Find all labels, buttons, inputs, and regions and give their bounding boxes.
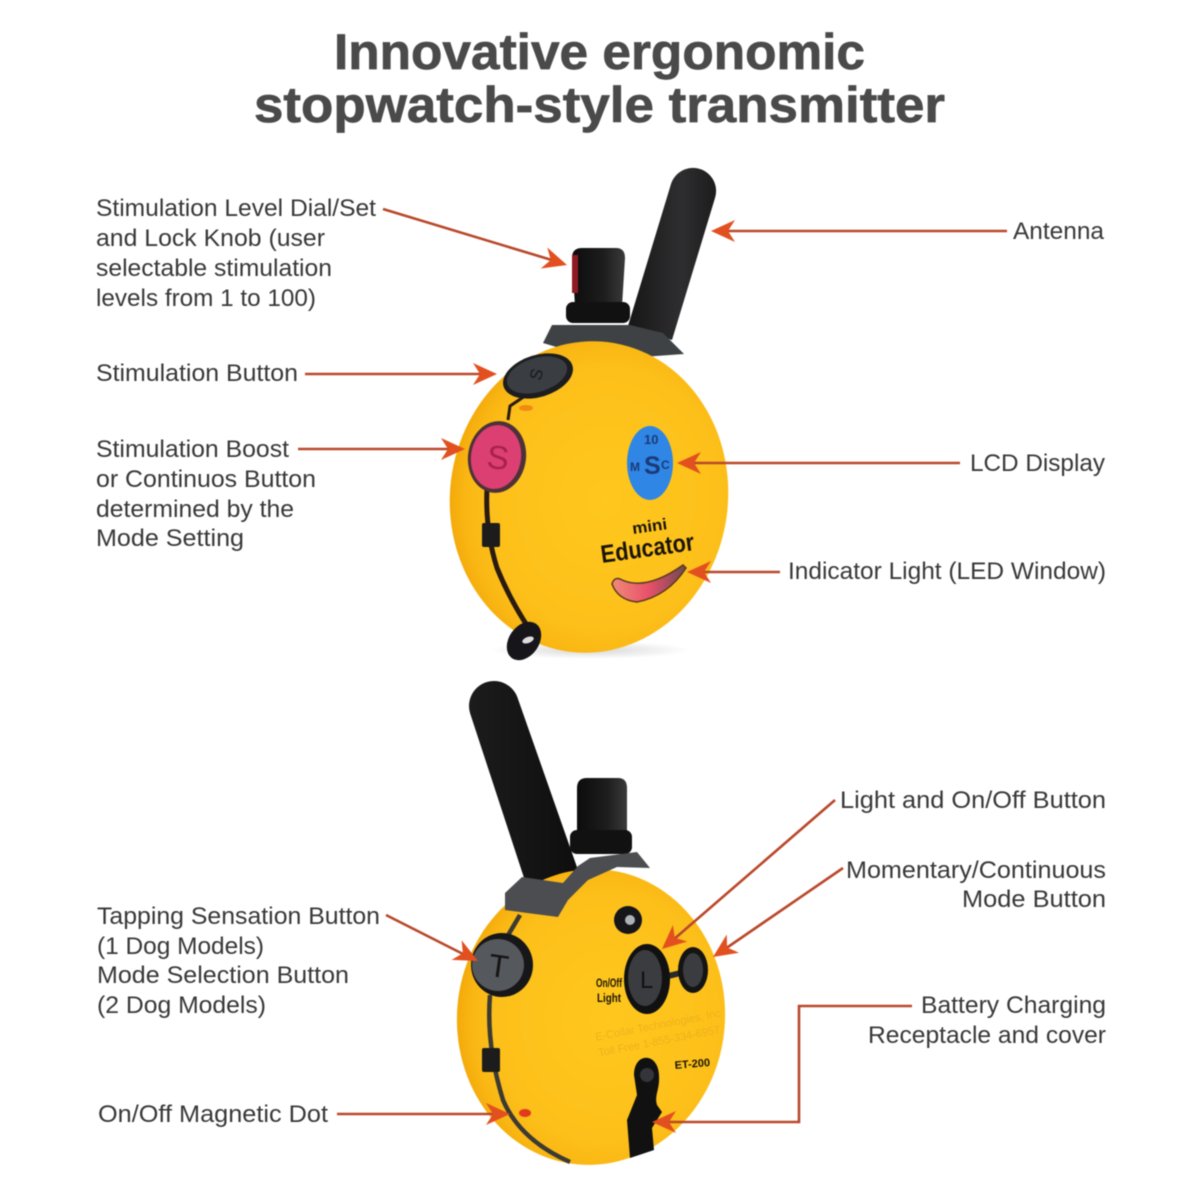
LCD display: M bbox=[630, 460, 640, 474]
yellow body bbox=[445, 858, 737, 1176]
on/off light label: Light bbox=[597, 991, 621, 1005]
arrow: indicator light bbox=[687, 561, 780, 583]
label: stimulation boost: Mode Setting bbox=[96, 525, 244, 552]
yellow body bbox=[432, 325, 746, 669]
LCD display bbox=[627, 426, 673, 500]
light button: L bbox=[640, 967, 653, 994]
label: tapping sensation: Mode Selection Button bbox=[97, 962, 349, 989]
arrow: mode button bbox=[707, 868, 843, 966]
label: stimulation boost: determined by the bbox=[96, 496, 294, 523]
charging receptacle and cover bbox=[627, 1058, 662, 1158]
mode button bbox=[678, 947, 708, 993]
on/off light label bbox=[596, 976, 623, 1005]
label: tapping sensation: (1 Dog Models) bbox=[97, 933, 264, 960]
label: stimulation boost: or Continuos Button bbox=[96, 466, 316, 493]
LCD display: C bbox=[661, 458, 670, 472]
tapping button bbox=[471, 933, 533, 997]
LCD display: 10 bbox=[644, 432, 658, 447]
antenna bbox=[469, 681, 578, 890]
dial knob bbox=[566, 248, 630, 323]
arrow: stimulation button bbox=[305, 363, 497, 385]
logo: Educator bbox=[599, 528, 696, 569]
antenna bbox=[628, 168, 716, 340]
label: stimulation level dial: Stimulation Level Dial/Set bbox=[96, 195, 376, 222]
label: stimulation button: Stimulation Button bbox=[96, 360, 298, 387]
label: battery charging bbox=[868, 992, 1106, 1049]
label: stimulation level dial bbox=[96, 195, 376, 312]
magnetic dot bbox=[519, 1109, 531, 1117]
title bbox=[254, 24, 945, 133]
title: Innovative ergonomic bbox=[334, 24, 865, 80]
arrow: LCD display bbox=[677, 452, 960, 474]
model label: ET-200 bbox=[674, 1057, 711, 1072]
label: battery charging: Receptacle and cover bbox=[868, 1022, 1106, 1049]
label: momentary mode bbox=[846, 857, 1106, 913]
cord bbox=[487, 488, 530, 630]
label: tapping sensation bbox=[97, 903, 380, 1019]
label: antenna: Antenna bbox=[1013, 218, 1105, 245]
LED window bbox=[612, 565, 686, 602]
device: front of transmitter bbox=[432, 168, 746, 669]
label: LCD display: LCD Display bbox=[970, 450, 1105, 477]
label: stimulation level dial: and Lock Knob (user bbox=[96, 225, 325, 252]
label: stimulation boost: Stimulation Boost bbox=[96, 436, 289, 463]
screw bbox=[614, 906, 642, 934]
label: battery charging: Battery Charging bbox=[921, 992, 1106, 1019]
light button bbox=[624, 944, 693, 1014]
cord bbox=[489, 915, 570, 1162]
tapping button: T bbox=[486, 947, 511, 985]
boost button bbox=[463, 417, 531, 497]
arrow: antenna bbox=[711, 220, 1007, 242]
arrow: boost button bbox=[298, 438, 465, 460]
label: magnetic dot: On/Off Magnetic Dot bbox=[98, 1101, 328, 1128]
logo: mini bbox=[631, 516, 668, 538]
label: stimulation level dial: levels from 1 to 100) bbox=[96, 285, 316, 312]
LCD display: S bbox=[644, 452, 661, 480]
arrow: magnetic dot bbox=[337, 1103, 510, 1125]
label: stimulation level dial: selectable stimulation bbox=[96, 255, 332, 282]
device: back of transmitter bbox=[445, 681, 737, 1176]
arrow: charging receptacle bbox=[652, 1006, 912, 1133]
mounting bracket bbox=[543, 325, 684, 360]
boost button: S bbox=[485, 438, 511, 477]
label: stimulation boost bbox=[96, 436, 316, 552]
label: tapping sensation: Tapping Sensation Button bbox=[97, 903, 380, 930]
title: stopwatch-style transmitter bbox=[254, 77, 945, 133]
faded company text bbox=[594, 1007, 725, 1059]
arrow: light button bbox=[655, 800, 835, 957]
label: indicator light: Indicator Light (LED Window) bbox=[788, 558, 1106, 585]
faded company text: Toll Free 1-855-334-6957 bbox=[597, 1024, 721, 1059]
arrow: tapping button bbox=[386, 915, 483, 971]
label: momentary mode: Momentary/Continuous bbox=[846, 857, 1106, 884]
cord loop bbox=[500, 615, 548, 667]
stimulation button bbox=[497, 345, 579, 407]
on/off light label: On/Off bbox=[596, 976, 623, 990]
dial knob bbox=[570, 778, 632, 854]
arrow: dial knob bbox=[383, 209, 570, 276]
label: tapping sensation: (2 Dog Models) bbox=[97, 992, 266, 1019]
faded company text: E-Collar Technologies, Inc bbox=[594, 1007, 722, 1044]
mounting bracket bbox=[505, 852, 650, 917]
stimulation button: S bbox=[526, 367, 547, 382]
label: momentary mode: Mode Button bbox=[962, 886, 1106, 913]
label: light button: Light and On/Off Button bbox=[840, 787, 1106, 814]
